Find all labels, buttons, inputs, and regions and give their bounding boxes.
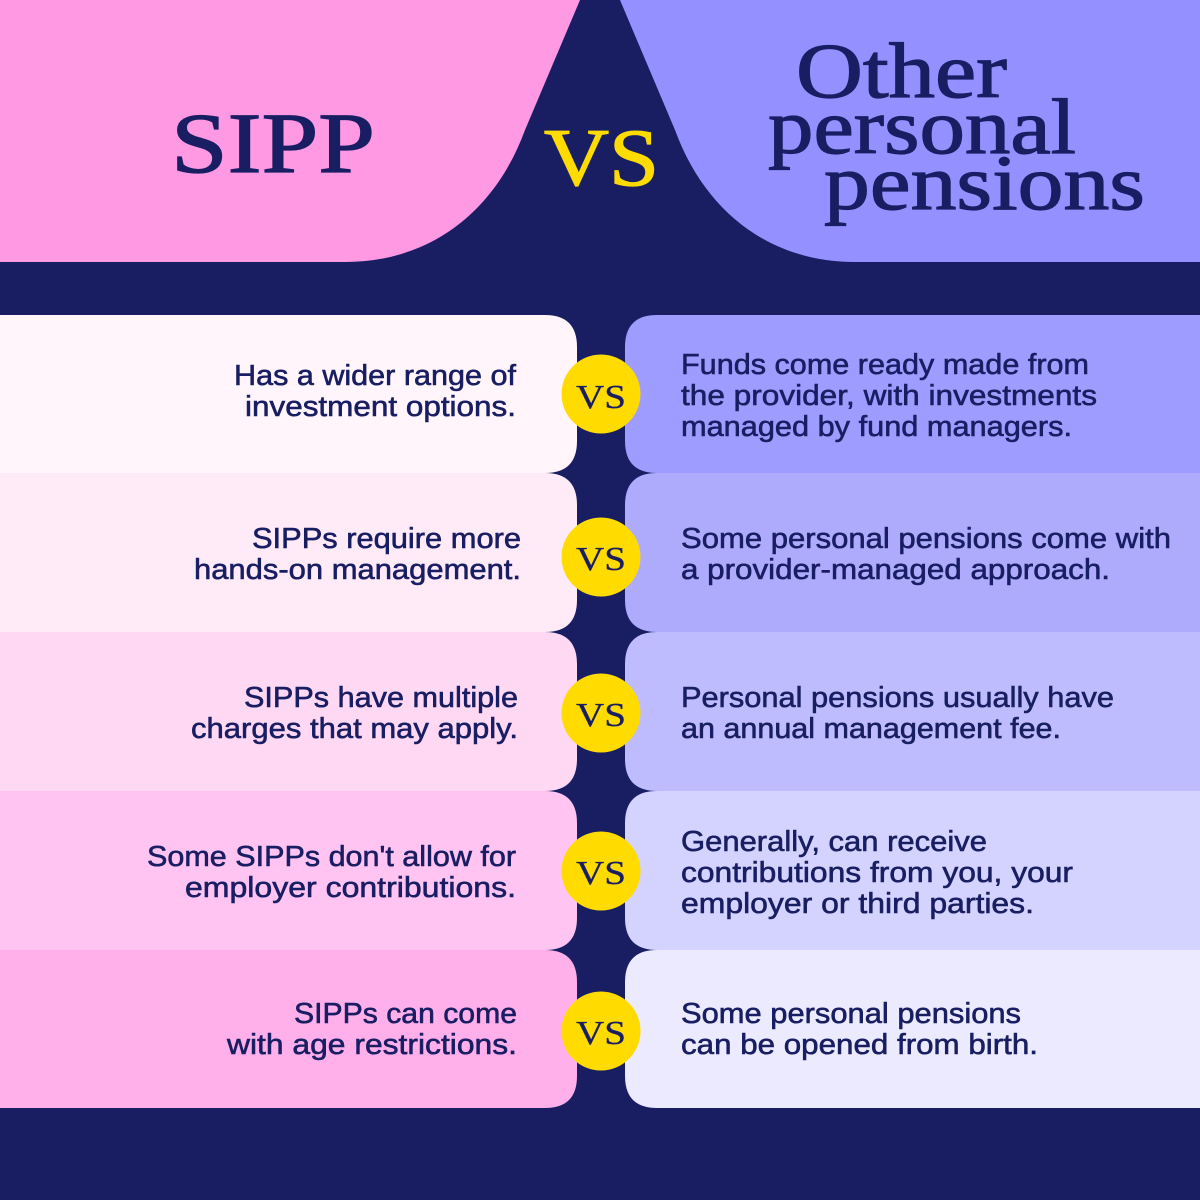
vs badge 2 xyxy=(562,518,640,596)
text: row 4 right: contributions from you, your xyxy=(681,857,1073,889)
vs badge 2: VS xyxy=(576,541,626,578)
vs badge 3 xyxy=(562,674,640,752)
vs badge 1 xyxy=(562,354,640,434)
row 5 left xyxy=(0,950,577,1108)
text: row 1 left: Has a wider range of xyxy=(234,360,517,392)
text: row 4 left: employer contributions. xyxy=(185,872,516,904)
text: row 3 right: Personal pensions usually have xyxy=(681,682,1114,714)
text: row 5 right: Some personal pensions xyxy=(681,998,1021,1030)
text: row 1 left: investment options. xyxy=(245,391,516,423)
text: row 1 right: the provider, with investments xyxy=(681,380,1097,412)
panel: other personal pensions header xyxy=(620,0,1200,262)
row 3 right xyxy=(625,632,1200,791)
heading: other personal pensions: pensions xyxy=(824,139,1145,226)
text: row 4 right xyxy=(681,826,1073,920)
text: row 4 right: employer or third parties. xyxy=(681,888,1034,920)
row 4 left xyxy=(0,791,577,950)
text: row 3 left xyxy=(191,682,518,745)
text: row 3 right: an annual management fee. xyxy=(681,713,1061,745)
heading: VS: VS xyxy=(544,112,659,203)
row 1 left xyxy=(0,315,577,473)
vs badge 5: VS xyxy=(576,1015,626,1052)
text: row 4 right: Generally, can receive xyxy=(681,826,987,858)
vs badge 5 xyxy=(562,992,640,1070)
vs badge 1: VS xyxy=(576,379,626,416)
vs badge 4 xyxy=(562,832,640,910)
text: row 2 left xyxy=(194,523,521,586)
vs badge 4: VS xyxy=(576,855,626,892)
text: row 1 right: Funds come ready made from xyxy=(681,349,1089,381)
text: row 5 right xyxy=(681,998,1038,1061)
text: row 5 right: can be opened from birth. xyxy=(681,1029,1038,1061)
heading: other personal pensions: personal xyxy=(768,83,1076,170)
text: row 5 left: with age restrictions. xyxy=(226,1029,517,1061)
text: row 3 left: charges that may apply. xyxy=(191,713,518,745)
text: row 2 left: SIPPs require more xyxy=(252,523,521,555)
text: row 2 right: a provider-managed approach. xyxy=(681,554,1110,586)
text: row 3 right xyxy=(681,682,1114,745)
vs badge 3: VS xyxy=(576,697,626,734)
text: row 1 right xyxy=(681,349,1097,443)
heading: SIPP: SIPP xyxy=(171,95,375,191)
text: row 3 left: SIPPs have multiple xyxy=(244,682,518,714)
text: row 5 left xyxy=(226,998,517,1061)
text: row 2 right xyxy=(681,523,1171,586)
text: row 2 right: Some personal pensions come with xyxy=(681,523,1171,555)
text: row 4 left xyxy=(147,841,516,904)
row 4 right xyxy=(625,791,1200,950)
text: row 2 left: hands-on management. xyxy=(194,554,521,586)
row 5 right xyxy=(625,950,1200,1108)
heading: other personal pensions: Other xyxy=(796,27,1007,114)
text: row 1 left xyxy=(234,360,517,423)
row 2 left xyxy=(0,473,577,632)
text: row 1 right: managed by fund managers. xyxy=(681,411,1072,443)
text: row 5 left: SIPPs can come xyxy=(294,998,517,1030)
row 1 right xyxy=(625,315,1200,473)
row 3 left xyxy=(0,632,577,791)
panel: SIPP header xyxy=(0,0,580,262)
text: row 4 left: Some SIPPs don't allow for xyxy=(147,841,516,873)
row 2 right xyxy=(625,473,1200,632)
heading: other personal pensions xyxy=(768,27,1145,226)
